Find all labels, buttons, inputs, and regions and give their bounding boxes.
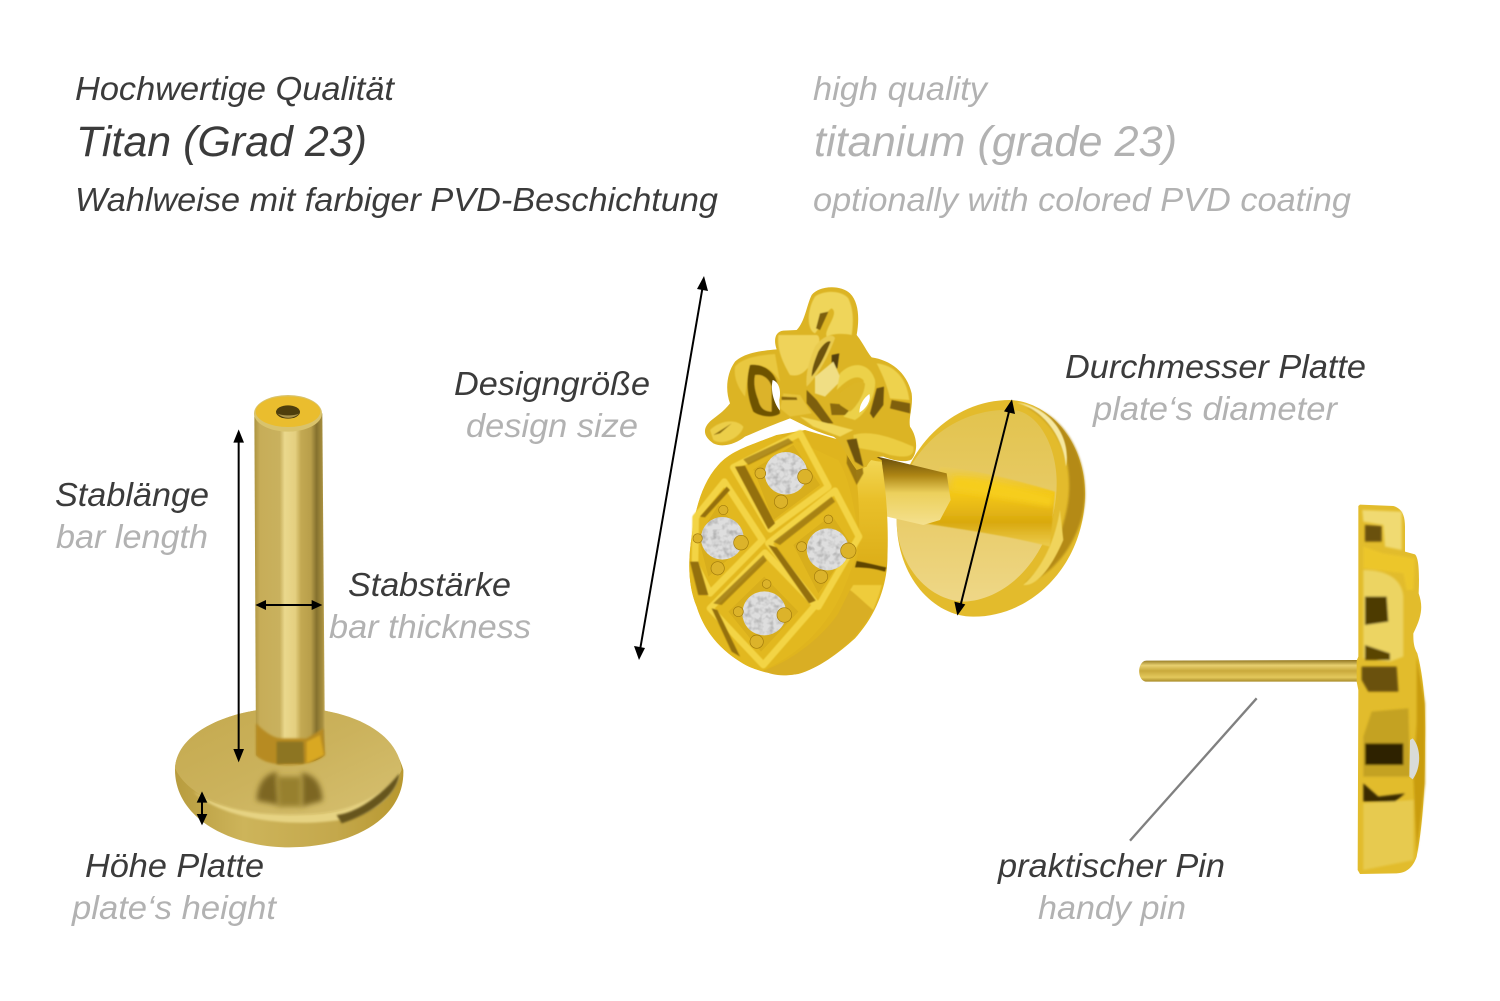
crown silhouette [705, 287, 916, 470]
rod top with hole [254, 395, 322, 432]
product image: pineapple labret [689, 287, 1085, 675]
lower-left leaf [710, 421, 743, 442]
label: design size: Designgröße [454, 365, 650, 402]
top lobe [809, 292, 853, 337]
heading: high quality: high quality [813, 70, 990, 107]
heading block: English [813, 70, 1352, 218]
pineapple crown bow [705, 287, 916, 470]
knot [780, 393, 812, 417]
heading: titanium (grade 23): titanium (grade 23) [814, 118, 1177, 166]
rod [254, 413, 325, 765]
right lobe [877, 363, 909, 400]
label: plate diameter [1065, 348, 1366, 427]
label: bar length [55, 476, 209, 555]
label: plate diameter: Durchmesser Platte [1065, 348, 1366, 385]
lattice: bright ridges [695, 433, 859, 665]
pin [1139, 660, 1358, 682]
label: plate height: Höhe Platte [85, 847, 264, 884]
label: plate diameter: plate‘s diameter [1092, 390, 1339, 427]
product image: side view with pin [1130, 505, 1425, 874]
gem edge [1409, 738, 1419, 779]
arrow: design size [634, 276, 708, 660]
side body [1357, 505, 1425, 874]
plate top surface [175, 707, 402, 815]
label: bar thickness: Stabstärke [348, 566, 511, 603]
disc plate and connecting bar [867, 400, 1085, 617]
label: design size [454, 365, 650, 444]
ribbon centre-left [778, 335, 819, 376]
label: handy pin [997, 847, 1225, 926]
left loop [735, 354, 780, 397]
label: bar length: bar length [56, 518, 208, 555]
label: plate height [71, 847, 278, 926]
lattice: dark channels [690, 438, 863, 657]
label: handy pin: handy pin [1038, 889, 1186, 926]
arrow: plate height [197, 791, 207, 825]
heading block: German [75, 70, 719, 218]
pineapple body [689, 430, 888, 675]
heading: Titan (Grad 23): Titan (Grad 23) [76, 118, 367, 166]
heading: Hochwertige Qualität: Hochwertige Qualität [75, 70, 396, 107]
plate edge [175, 707, 403, 847]
label: plate height: plate‘s height [71, 889, 278, 926]
label: bar length: Stablänge [55, 476, 209, 513]
centre folds [806, 336, 835, 387]
lower-right lobe [853, 433, 914, 457]
right loop [837, 365, 875, 420]
leader line: handy pin [1130, 698, 1257, 841]
gemstones [701, 452, 849, 635]
label: design size: design size [466, 407, 638, 444]
gem prongs [693, 468, 856, 648]
label: bar thickness: bar thickness [329, 608, 531, 645]
label: handy pin: praktischer Pin [997, 847, 1225, 884]
arrow: plate diameter [954, 399, 1015, 616]
lattice: recessed settings [698, 445, 852, 652]
face [689, 435, 859, 671]
label: bar thickness [329, 566, 531, 645]
arrow: bar thickness [255, 600, 322, 610]
arrow: bar length [233, 429, 244, 762]
product image: threaded post with plate [175, 395, 403, 847]
text: PVD coating German: Wahlweise mit farbiger PVD-Beschichtung [75, 181, 719, 218]
text: PVD coating English: optionally with colored PVD coating [813, 181, 1352, 218]
bow openings [772, 380, 780, 411]
body silhouette and side [689, 430, 888, 675]
